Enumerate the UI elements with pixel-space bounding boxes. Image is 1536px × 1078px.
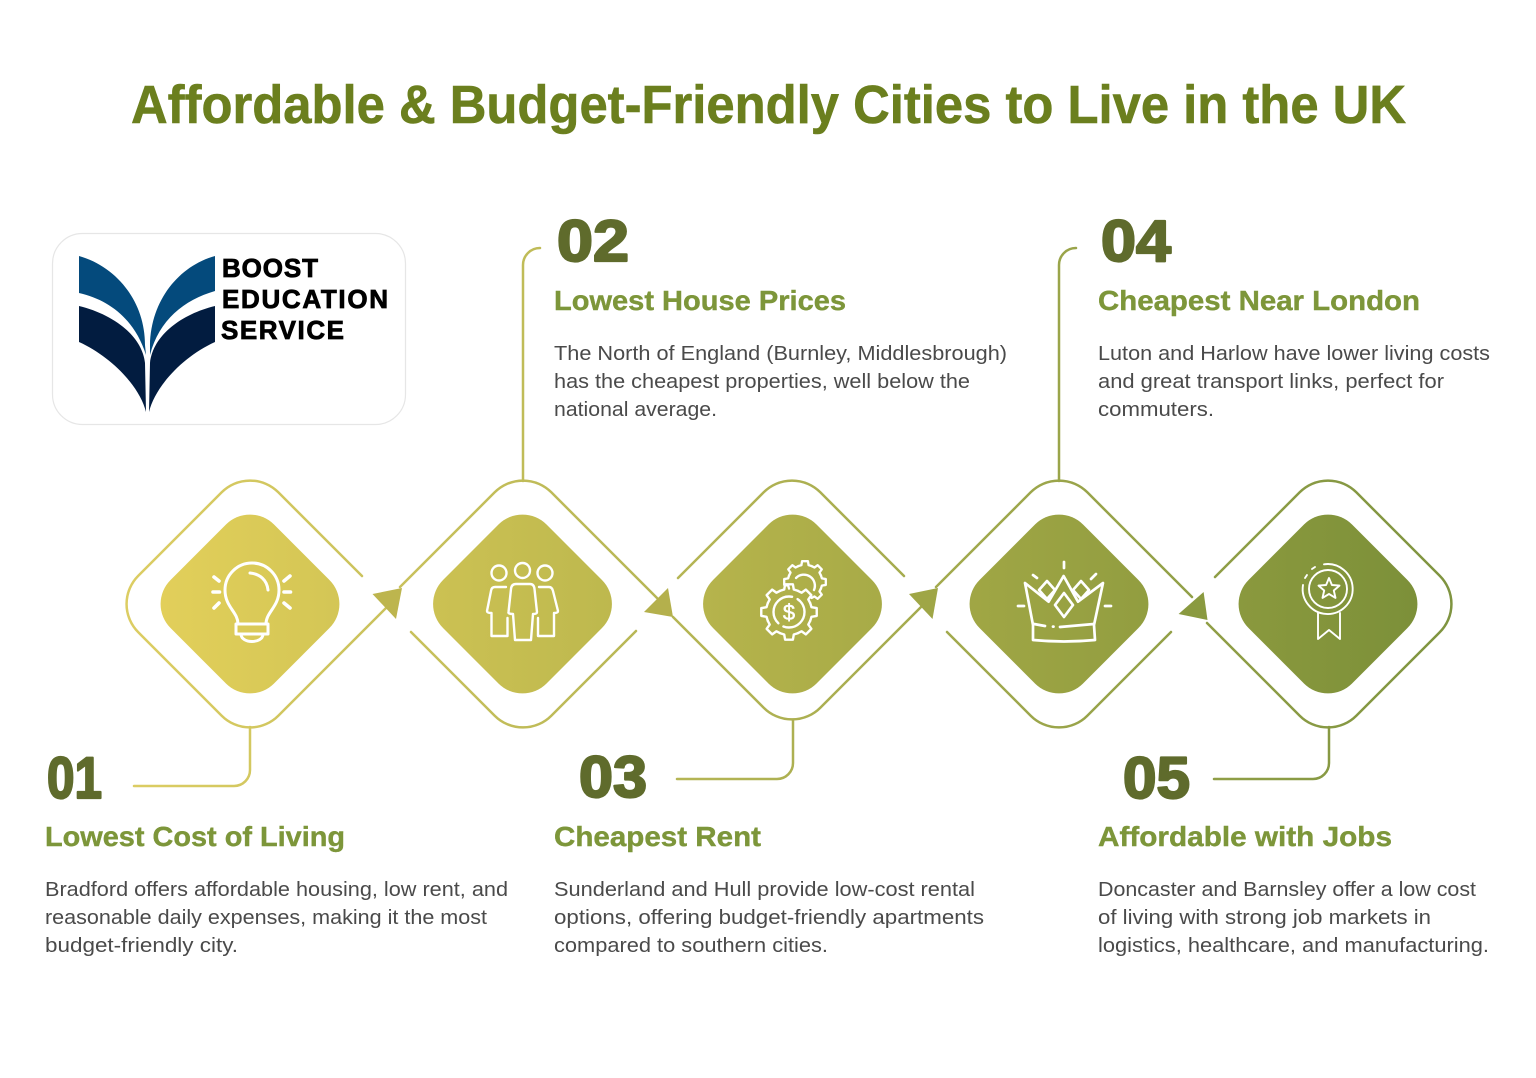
logo wordmark: EDUCATION bbox=[222, 284, 388, 314]
outline: diamond 1 bbox=[127, 481, 386, 727]
connector 03 bbox=[677, 720, 793, 779]
description 05 bbox=[1098, 878, 1489, 957]
number 02: 02 bbox=[557, 209, 629, 274]
description 04: and great transport links, perfect for bbox=[1098, 370, 1444, 393]
step 01 bbox=[45, 746, 508, 957]
connector 01 bbox=[134, 727, 250, 786]
icon: light bulb bbox=[213, 563, 290, 642]
heading 05: Affordable with Jobs bbox=[1098, 821, 1392, 852]
logo card bbox=[52, 234, 406, 424]
description 02: has the cheapest properties, well below the bbox=[554, 370, 970, 393]
description 04 bbox=[1098, 342, 1490, 421]
step 05 bbox=[1098, 746, 1489, 957]
heading 02: Lowest House Prices bbox=[554, 285, 846, 316]
description 05: logistics, healthcare, and manufacturing. bbox=[1098, 934, 1489, 957]
description 01: reasonable daily expenses, making it the most bbox=[45, 906, 487, 929]
arrow 4 bbox=[1179, 592, 1208, 620]
icon: gears with dollar bbox=[761, 561, 826, 640]
connector 04 bbox=[1059, 248, 1076, 481]
number 04: 04 bbox=[1101, 209, 1171, 274]
heading 01: Lowest Cost of Living bbox=[45, 821, 345, 852]
icon: medal bbox=[1303, 564, 1353, 639]
diamond 4 fill bbox=[970, 515, 1148, 693]
description 03: compared to southern cities. bbox=[554, 934, 828, 957]
icon: people bbox=[487, 563, 558, 640]
description 04: Luton and Harlow have lower living costs bbox=[1098, 342, 1490, 365]
connector 02 bbox=[523, 248, 540, 481]
logo wordmark: BOOST bbox=[222, 253, 318, 283]
number 05: 05 bbox=[1123, 746, 1190, 811]
description 02: national average. bbox=[554, 398, 717, 421]
heading 04: Cheapest Near London bbox=[1098, 285, 1420, 316]
icon: crown bbox=[1018, 562, 1111, 642]
outline: diamond 5 bbox=[1207, 481, 1451, 727]
diamond 1 fill bbox=[161, 515, 339, 693]
arrow 1 bbox=[372, 588, 402, 619]
title: Affordable & Budget-Friendly Cities to Live in the UK bbox=[131, 75, 1406, 135]
step 04 bbox=[1098, 209, 1490, 421]
description 01 bbox=[45, 878, 508, 957]
arrow 3 bbox=[909, 588, 938, 619]
outline: diamond 2 bbox=[400, 481, 658, 727]
connector 05 bbox=[1214, 727, 1329, 779]
step 02 bbox=[554, 209, 1007, 421]
description 03: options, offering budget-friendly apartments bbox=[554, 906, 984, 929]
step 03 bbox=[554, 745, 984, 957]
heading 03: Cheapest Rent bbox=[554, 821, 761, 852]
description 05: of living with strong job markets in bbox=[1098, 906, 1431, 929]
diamond 5 fill bbox=[1239, 515, 1417, 693]
logo wordmark: SERVICE bbox=[221, 315, 344, 345]
description 01: budget-friendly city. bbox=[45, 934, 238, 957]
description 03 bbox=[554, 878, 984, 957]
description 03: Sunderland and Hull provide low-cost rental bbox=[554, 878, 975, 901]
diamond 2 fill bbox=[433, 515, 612, 693]
logo wordmark bbox=[221, 253, 388, 345]
description 02: The North of England (Burnley, Middlesbrough) bbox=[554, 342, 1007, 365]
number 03: 03 bbox=[579, 745, 647, 810]
description 01: Bradford offers affordable housing, low rent, and bbox=[45, 878, 508, 901]
description 02 bbox=[554, 342, 1007, 421]
description 04: commuters. bbox=[1098, 398, 1214, 421]
number 01: 01 bbox=[47, 746, 102, 811]
outline: diamond 3 bbox=[673, 481, 922, 719]
outline: diamond 4 bbox=[936, 481, 1192, 727]
logo mark bbox=[79, 256, 215, 412]
diamond 3 fill bbox=[703, 515, 882, 693]
arrow 2 bbox=[644, 588, 673, 617]
description 05: Doncaster and Barnsley offer a low cost bbox=[1098, 878, 1476, 901]
icon: gears with dollar: $ bbox=[783, 600, 795, 625]
